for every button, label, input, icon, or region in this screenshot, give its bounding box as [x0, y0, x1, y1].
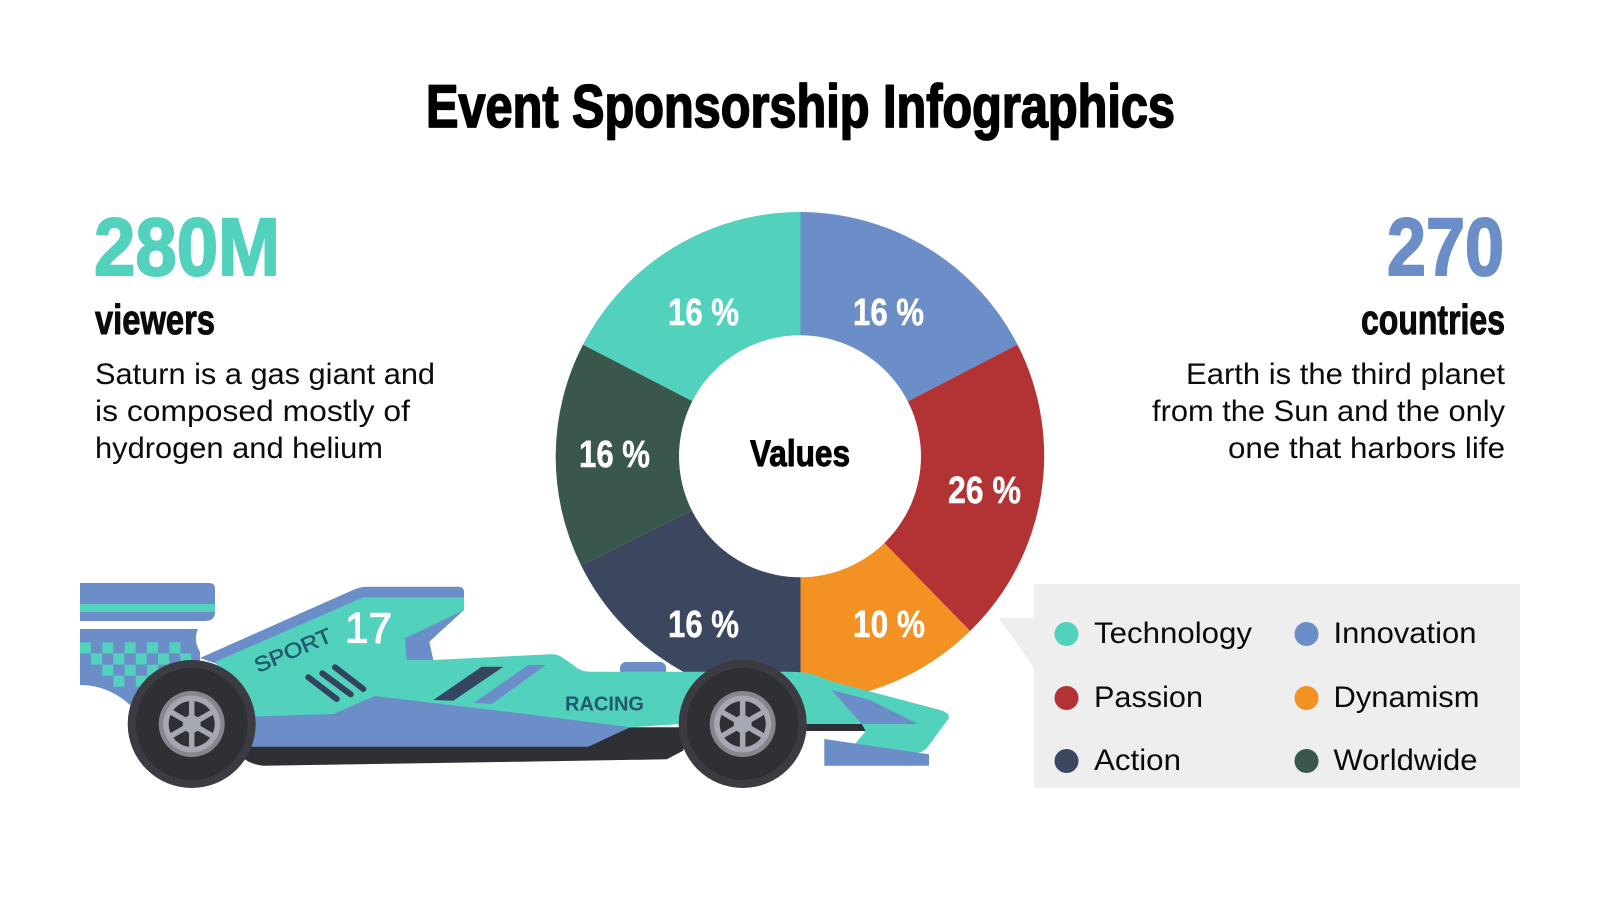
panel: countries stat	[1152, 202, 1505, 465]
stat number: 270: 270	[1387, 202, 1504, 293]
text: sport: SPORT	[251, 624, 336, 678]
car underside	[240, 727, 690, 766]
blue slash	[474, 665, 546, 704]
value: dynamism 10%: 10 %	[853, 604, 925, 646]
car body	[215, 597, 949, 753]
slice: passion	[800, 345, 1044, 631]
slice: action	[581, 457, 800, 702]
value: action 16%: 16 %	[668, 604, 739, 646]
slice: dynamism	[800, 457, 970, 702]
donut chart: values	[556, 212, 1044, 702]
rear wing upper	[80, 583, 215, 621]
number: 17: 17	[345, 605, 392, 653]
viewers description: hydrogen and helium	[95, 432, 383, 465]
stat label: countries: countries	[1361, 296, 1505, 343]
legend background	[999, 584, 1520, 788]
text: racing: RACING	[565, 694, 644, 716]
legend item: technology: Technology	[1094, 617, 1252, 650]
countries description: one that harbors life	[1228, 432, 1505, 465]
donut hole	[679, 335, 921, 577]
value: innovation 16%: 16 %	[853, 292, 924, 334]
legend item: worldwide: Worldwide	[1334, 744, 1478, 777]
rear wheel	[128, 660, 256, 788]
legend item: dynamism: Dynamism	[1334, 681, 1480, 714]
illustration: racing car	[80, 583, 949, 788]
countries description	[1152, 358, 1505, 465]
panel: viewers stat	[94, 202, 435, 465]
slice: technology	[583, 212, 800, 457]
rear wing lower	[80, 629, 200, 705]
cockpit seat	[620, 662, 666, 682]
side vents	[308, 667, 363, 699]
dark slash	[433, 667, 503, 701]
legend item: passion: Passion	[1094, 681, 1203, 714]
viewers description: Saturn is a gas giant and	[95, 358, 435, 391]
value: technology 16%: 16 %	[668, 292, 739, 334]
legend item: action	[1054, 744, 1181, 777]
checkered pattern	[80, 642, 191, 687]
slice: worldwide	[556, 345, 800, 565]
side panel blue	[240, 696, 630, 747]
nose blue accent	[832, 690, 918, 724]
countries description: Earth is the third planet	[1186, 358, 1505, 391]
stat number: 280M: 280M	[94, 202, 280, 293]
cockpit blue band	[200, 587, 464, 670]
title: Event Sponsorship Infographics	[426, 73, 1175, 140]
legend item: innovation: Innovation	[1334, 617, 1476, 650]
stat label: viewers: viewers	[95, 296, 215, 343]
nose underside strip	[790, 720, 866, 731]
front wing	[824, 739, 929, 766]
value: passion 26%: 26 %	[948, 470, 1021, 512]
rear wing stripe	[80, 604, 215, 612]
slice: innovation	[800, 212, 1018, 457]
front wheel	[679, 660, 807, 788]
viewers description	[95, 358, 435, 465]
countries description: from the Sun and the only	[1152, 395, 1505, 428]
legend callout	[999, 584, 1520, 788]
legend item: action: Action	[1094, 744, 1181, 777]
value: worldwide 16%: 16 %	[579, 434, 650, 476]
viewers description: is composed mostly of	[95, 395, 411, 428]
center label: Values	[750, 433, 850, 474]
